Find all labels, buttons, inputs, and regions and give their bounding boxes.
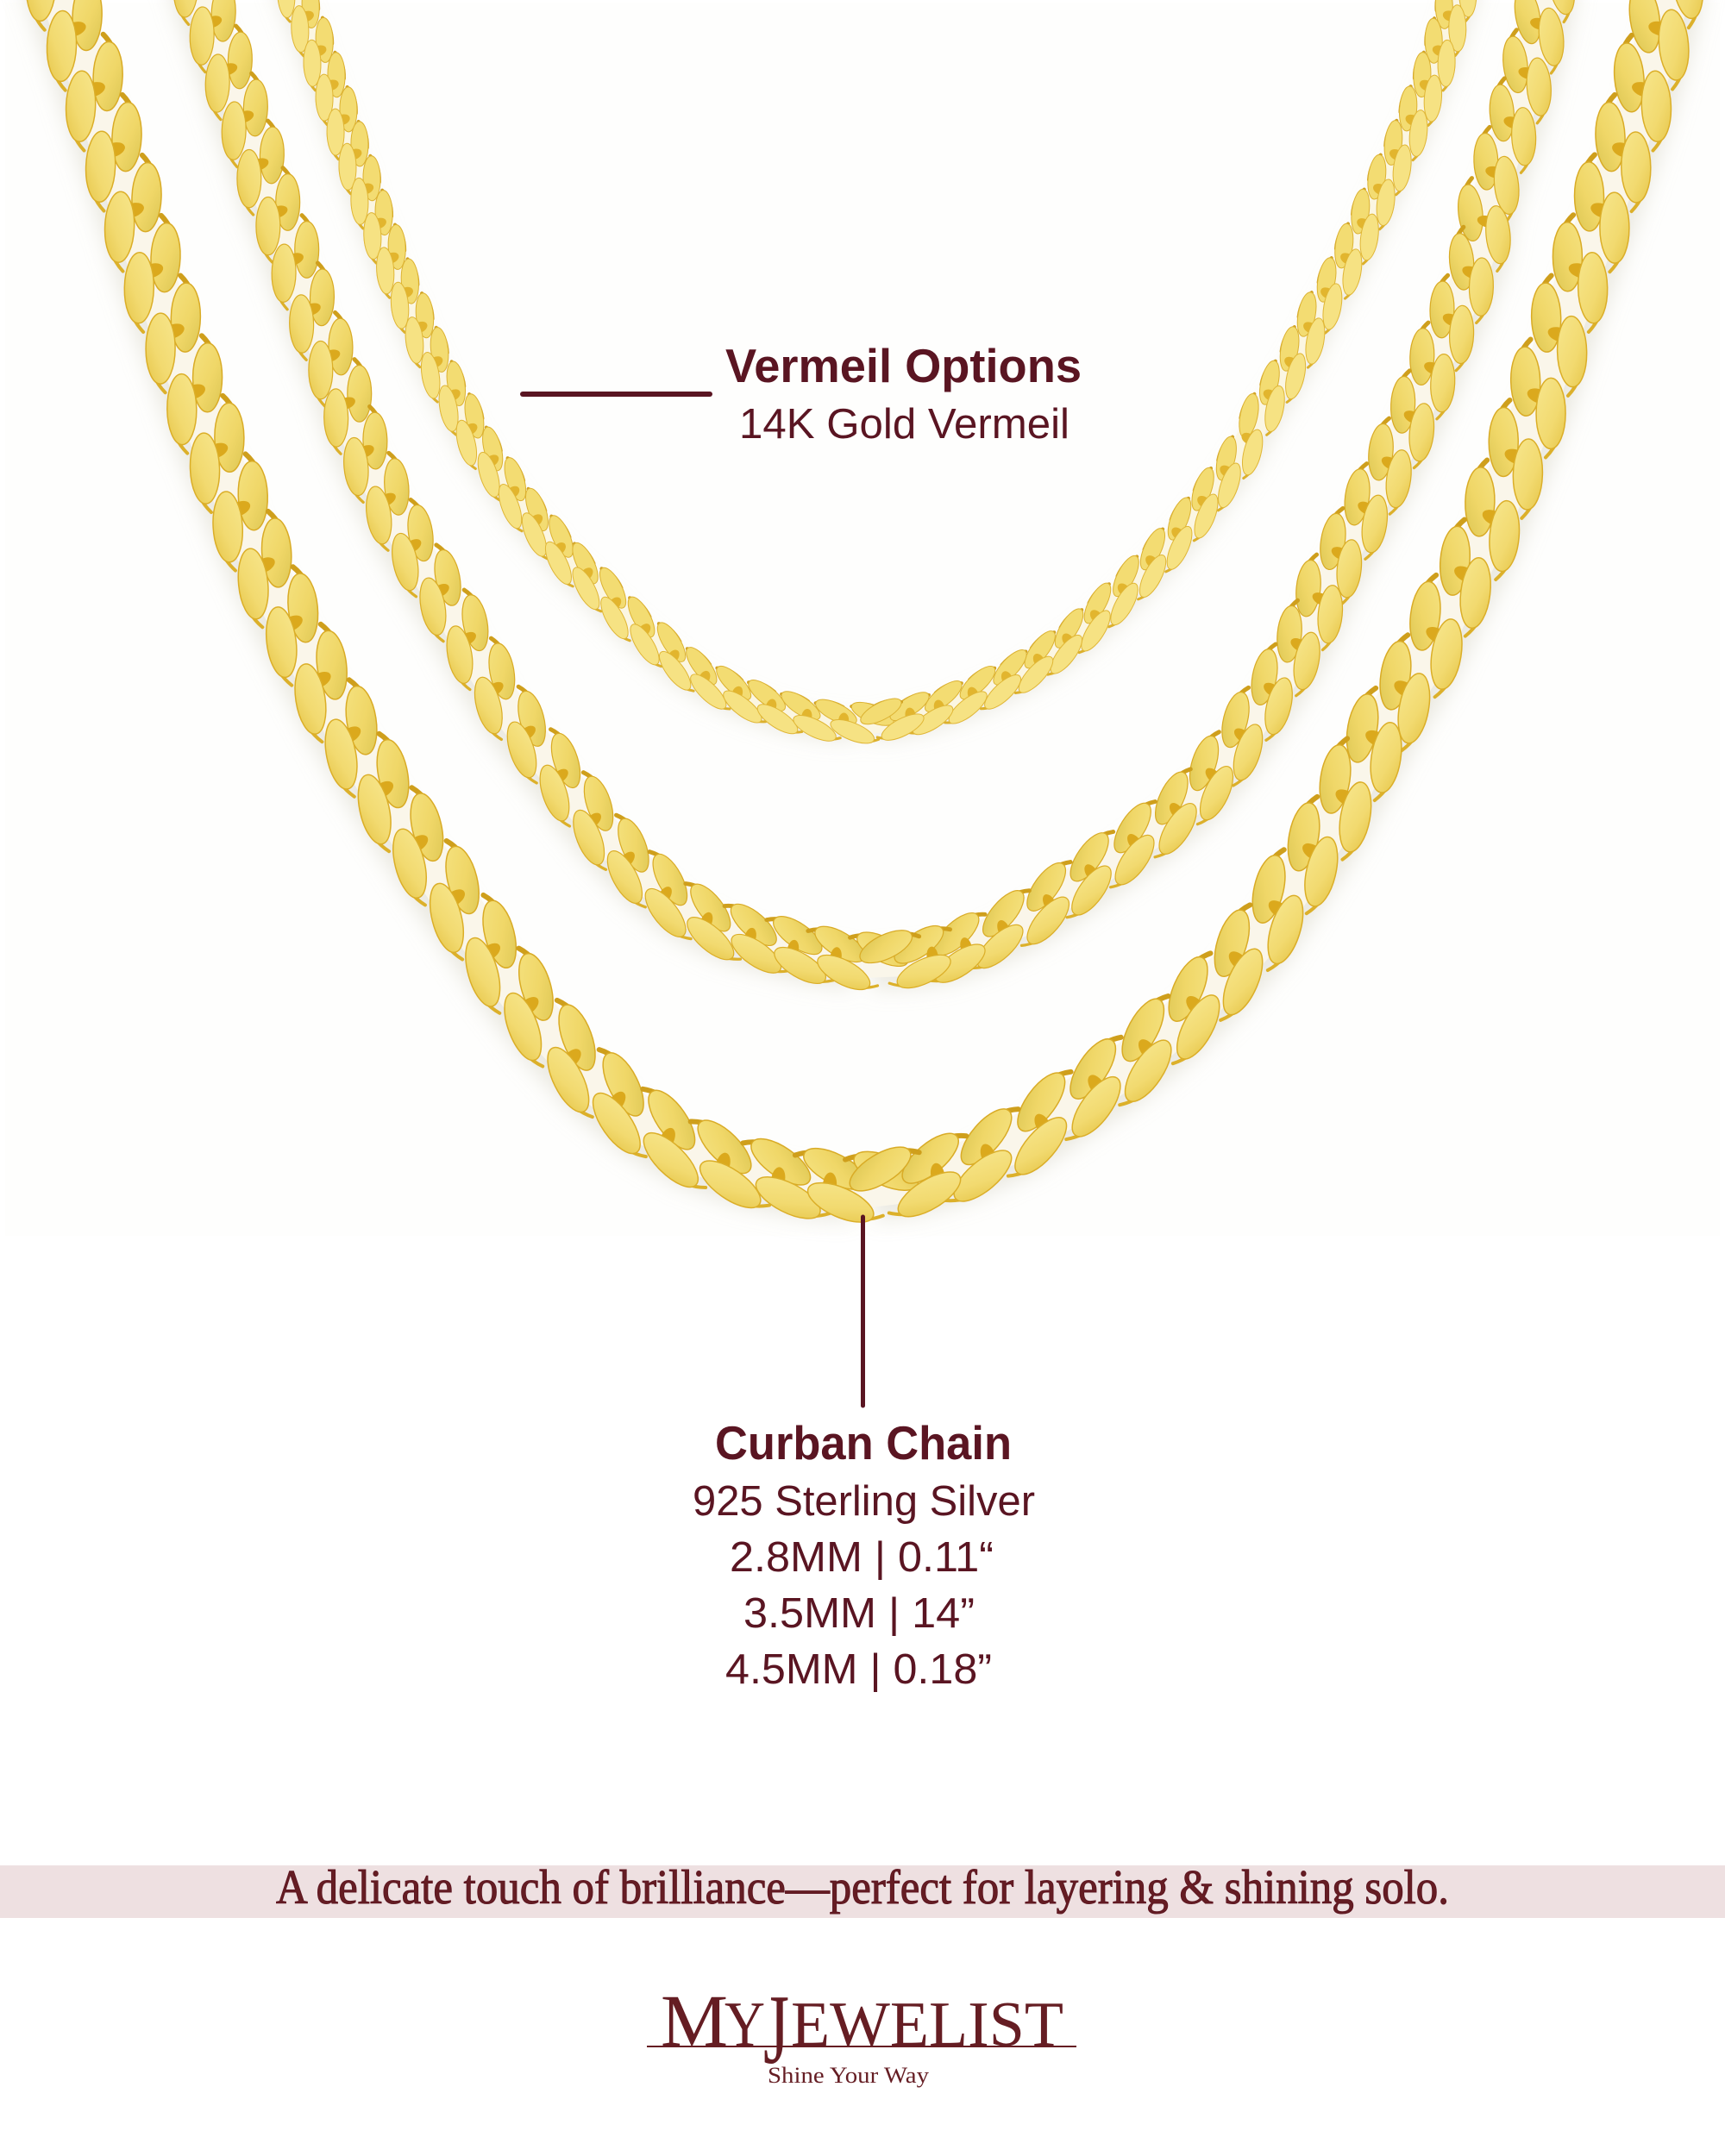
logo: MyJewelist: J [763,1975,789,2085]
text: size 2.8mm: 2.8MM | 0.11“ [730,1534,994,1581]
heading: vermeil options: Vermeil Options [725,339,1082,392]
photo background [5,3,1720,1236]
text: 14K gold vermeil: 14K Gold Vermeil [739,401,1070,448]
banner band [0,1865,1725,1918]
logo tagline: Shine Your Way [768,2063,929,2088]
chain shadows [34,0,1688,1197]
callout: vermeil options [725,339,1082,448]
callout line: curban chain [861,1217,865,1406]
chain: outer strand [45,0,1678,1187]
chain: middle strand [190,0,1551,961]
heading: curban chain: Curban Chain [715,1416,1012,1470]
text: size 4.5mm: 4.5MM | 0.18” [725,1646,992,1693]
logo: MyJewelist: EWELIST [791,1990,1063,2060]
callout line: vermeil options [523,392,710,397]
chain: inner 14K vermeil strand [286,0,1466,723]
banner tagline: A delicate touch of brilliance—perfect for layering & shining solo. [276,1861,1449,1915]
text: size 3.5mm: 3.5MM | 14” [743,1590,975,1637]
callout: curban chain specs [693,1416,1035,1693]
logo: MyJewelist: Y [724,1990,765,2060]
text: material: 925 Sterling Silver [693,1478,1035,1525]
logo: MyJewelist: M [661,1979,728,2062]
logo: MyJewelist [647,1975,1076,2085]
